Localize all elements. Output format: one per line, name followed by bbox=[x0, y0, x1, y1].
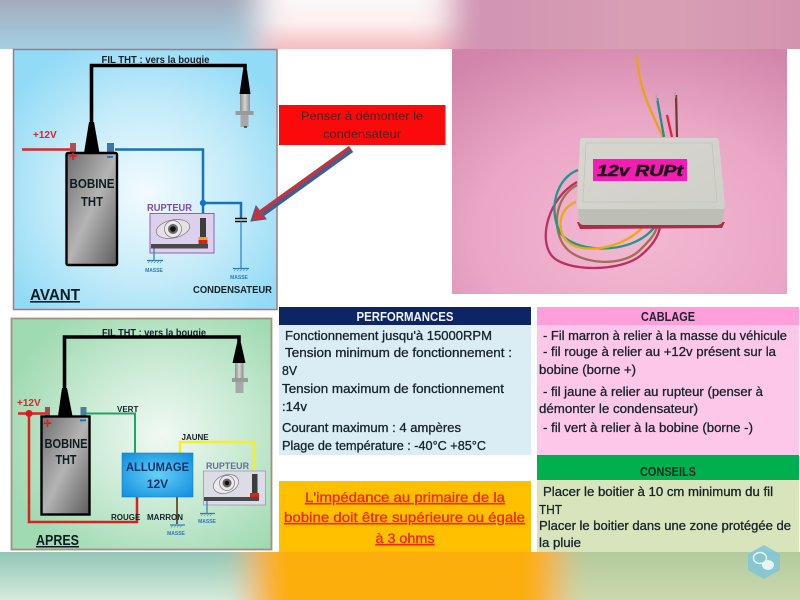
text: cablage list: - Fil marron à relier à la masse du véhicule bbox=[543, 328, 787, 343]
label: +12V apres: +12V bbox=[17, 398, 41, 409]
icon: rupteur avant bbox=[150, 214, 214, 253]
text: cablage list: démonter le condensateur) bbox=[539, 401, 698, 416]
text: conseils list bbox=[539, 484, 791, 550]
icon: bobine avant: THT bbox=[81, 194, 103, 209]
icon: spark plug avant bbox=[236, 70, 254, 127]
text: performances list: 8V bbox=[282, 363, 297, 378]
heading: conseils bbox=[537, 455, 799, 480]
icon: masse rupteur bbox=[145, 248, 164, 274]
icon: bobine apres: THT bbox=[56, 452, 77, 467]
icon: masse rupteur apres bbox=[198, 501, 217, 525]
icon: module allumage: ALLUMAGE bbox=[126, 460, 189, 474]
icon: spark plug apres bbox=[232, 343, 248, 393]
bottom blurred band bbox=[0, 552, 800, 600]
icon: masse rupteur: MASSE bbox=[145, 268, 164, 274]
icon: module allumage bbox=[122, 453, 193, 497]
text: performances list: Tension minimum de fonctionnement : bbox=[285, 345, 512, 360]
box label bbox=[593, 159, 687, 181]
panel: avant diagram bbox=[14, 50, 277, 310]
wire: jaune bbox=[180, 442, 254, 475]
box shadow bbox=[577, 222, 725, 229]
text: performances list: Fonctionnement jusqu'à 15000RPM bbox=[285, 328, 492, 343]
text: cablage list: bobine (borne +) bbox=[539, 362, 636, 377]
label: fil THT avant: FIL THT : vers la bougie bbox=[102, 54, 210, 66]
icon: masse rupteur apres: MASSE bbox=[198, 519, 217, 525]
label: rupteur avant: RUPTEUR bbox=[147, 203, 193, 214]
node: +12V apres bbox=[26, 410, 32, 417]
icon: chat badge bbox=[748, 545, 780, 579]
text: cablage list bbox=[539, 328, 787, 435]
text: conseils list: Placer le boitier dans une zone protégée de bbox=[539, 518, 791, 533]
wire: bleu avant bbox=[115, 150, 241, 218]
label: marron: MARRON bbox=[147, 513, 183, 522]
icon: bobine apres: BOBINE bbox=[44, 436, 88, 451]
callout: impedance: L'impédance au primaire de la bbox=[305, 489, 505, 505]
label: jaune: JAUNE bbox=[182, 433, 209, 442]
text: conseils list: la pluie bbox=[539, 535, 581, 550]
wire: rouge alimentation bbox=[18, 414, 137, 522]
photo: boitier 12v rupt bbox=[452, 48, 787, 294]
text: cablage list: - fil rouge à relier au +12v présent sur la bbox=[543, 344, 777, 359]
label: rouge: ROUGE bbox=[111, 513, 141, 522]
text: performances list: Courant maximum : 4 ampères bbox=[282, 420, 462, 435]
text: conseils list: Placer le boitier à 10 cm minimum du fil bbox=[543, 484, 773, 499]
callout: penser a demonter: Penser à démonter le bbox=[301, 109, 423, 123]
callout: penser a demonter: condensateur bbox=[323, 127, 401, 141]
label: avant: AVANT bbox=[30, 287, 80, 304]
icon: module allumage: 12V bbox=[147, 477, 168, 491]
icon: rupteur apres bbox=[204, 471, 266, 505]
callout: impedance bbox=[279, 481, 531, 552]
panel: apres diagram bbox=[12, 318, 272, 550]
text: performances list: Plage de température : -40°C +85°C bbox=[282, 438, 486, 453]
label: vert: VERT bbox=[117, 405, 138, 414]
heading: performances bbox=[279, 307, 531, 325]
text: performances list: :14v bbox=[282, 399, 308, 414]
top blurred band bbox=[0, 0, 800, 49]
callout: impedance: bobine doit être supérieure ou égale bbox=[284, 509, 525, 525]
label: rupteur apres: RUPTEUR bbox=[206, 461, 249, 472]
wire: +12V avant bbox=[22, 148, 73, 151]
icon: bobine apres: + bbox=[43, 415, 52, 432]
icon: masse marron: MASSE bbox=[167, 531, 186, 537]
text: performances list: Tension maximum de fonctionnement bbox=[282, 381, 504, 396]
icon: masse condensateur bbox=[230, 268, 249, 281]
icon: bobine apres bbox=[42, 388, 90, 514]
wires: top bbox=[636, 48, 677, 137]
box lid bbox=[577, 138, 725, 209]
text: cablage list: - fil jaune à relier au rupteur (penser à bbox=[543, 384, 764, 399]
icon: bobine avant: BOBINE bbox=[70, 176, 115, 191]
panel: performances bbox=[279, 307, 531, 455]
wire: marron bbox=[176, 497, 178, 524]
icon: masse marron bbox=[167, 525, 186, 537]
wires: loops bbox=[546, 170, 660, 268]
wire: vert bbox=[85, 414, 135, 453]
callout: penser a demonter bbox=[279, 105, 446, 145]
label: fil THT apres: FIL THT : vers la bougie bbox=[102, 327, 206, 339]
box label: 12v RUPt bbox=[597, 163, 684, 180]
label: +12V avant: +12V bbox=[33, 130, 57, 141]
heading: cablage bbox=[537, 307, 799, 325]
icon: bobine avant bbox=[66, 122, 117, 265]
heading: cablage: CABLAGE bbox=[641, 310, 695, 324]
label: condensateur: CONDENSATEUR bbox=[193, 284, 272, 296]
callout: impedance: à 3 ohms bbox=[376, 530, 434, 546]
arrow: vers condensateur bbox=[251, 148, 351, 221]
box body bbox=[578, 208, 725, 225]
icon: condensateur bbox=[235, 218, 247, 268]
text: cablage list: - fil vert à relier à la bobine (borne -) bbox=[543, 420, 753, 435]
panel: cablage bbox=[537, 307, 799, 455]
wire: THT apres bbox=[64, 337, 239, 390]
node: jonction bbox=[200, 200, 206, 206]
heading: performances: PERFORMANCES bbox=[356, 310, 454, 324]
text: performances list bbox=[282, 328, 512, 453]
panel: conseils bbox=[537, 455, 799, 552]
icon: bobine avant: + bbox=[69, 148, 78, 165]
text: conseils list: THT bbox=[539, 502, 562, 517]
icon: masse condensateur: MASSE bbox=[230, 275, 249, 281]
wire: THT avant bbox=[92, 66, 245, 125]
label: apres: APRES bbox=[36, 532, 79, 549]
heading: conseils: CONSEILS bbox=[640, 465, 696, 479]
